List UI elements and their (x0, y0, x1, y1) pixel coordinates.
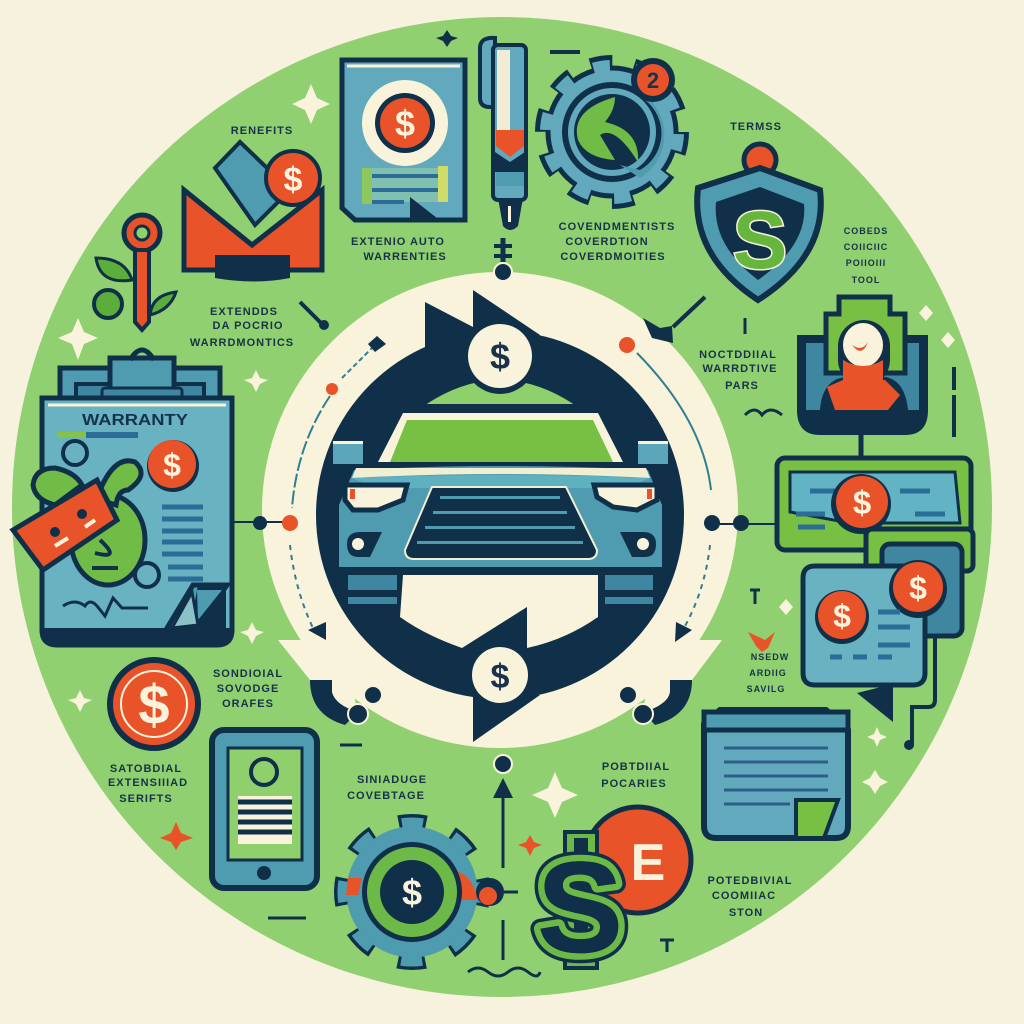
label: potential consumption (708, 875, 792, 919)
icon: folder document (704, 710, 848, 838)
icon: key plant (94, 215, 176, 330)
label: new savings: NSEDW (751, 652, 789, 662)
icon: gear with badge (546, 58, 678, 198)
label: coverage tool: POIIOIII (846, 258, 886, 268)
label: warranty parts: WARRDTIVE (702, 363, 778, 375)
label: service: SOVODGE (217, 683, 279, 695)
label: coverage: COVEBTAGE (347, 790, 425, 802)
label: coverage tool (844, 226, 888, 285)
label: coverage tool: TOOL (852, 275, 880, 285)
car illustration (333, 404, 668, 604)
icon: cards with dollars: $ (909, 570, 927, 606)
label: extended warranties (190, 306, 294, 349)
icon: red dollar coin (110, 660, 198, 748)
label: covenants: COVERDTION (565, 236, 649, 248)
icon: red dollar coin: $ (138, 673, 170, 736)
label: extended auto warranties: EXTENIO AUTO (351, 236, 445, 248)
label: terms: TERMSS (730, 121, 782, 133)
label: extended benefits: SATOBDIAL (110, 763, 182, 775)
label: extended warranties: EXTENDDS (210, 306, 278, 318)
icon: large green dollar and coin: S (537, 834, 623, 980)
label: covenants: COVERDMOITIES (560, 251, 666, 263)
label: warranty parts (699, 349, 778, 392)
label: potential programs: POCARIES (601, 778, 667, 790)
icon: pen (480, 38, 526, 230)
label: new savings (747, 652, 789, 694)
icon: document with dollar (342, 60, 465, 220)
warranty document (13, 350, 232, 645)
label: coverage: SINIADUGE (357, 774, 427, 786)
label: service (213, 668, 283, 710)
top dollar badge (464, 322, 536, 394)
top dollar badge: $ (490, 336, 510, 377)
label: coverage (347, 774, 427, 802)
icon: large green dollar and coin (537, 807, 691, 980)
label: warranty parts: PARS (725, 380, 759, 392)
label: potential programs (601, 761, 670, 790)
icon: shield: S (733, 195, 787, 286)
label: warranty parts: NOCTDDIIAL (699, 349, 777, 361)
label: coverage tool: COBEDS (844, 226, 888, 236)
icon: large green dollar and coin: E (631, 834, 665, 892)
icon: document with dollar: $ (395, 103, 415, 144)
label: new savings: SAVILG (747, 684, 785, 694)
label: extended warranties: DA POCRIO (213, 320, 283, 332)
icon: shield (697, 144, 821, 300)
icon: envelope with dollar (184, 142, 322, 282)
label: potential consumption: COOMIIAC (712, 890, 776, 902)
icon: phone (212, 730, 317, 888)
label: extended benefits (108, 763, 188, 805)
icon: gear with badge: 2 (647, 68, 659, 93)
label: service: ORAFES (222, 698, 274, 710)
icon: person card (797, 297, 928, 458)
label: extended benefits: SERIFTS (119, 793, 173, 805)
center cream circle (262, 272, 738, 748)
warranty document: $ (163, 447, 181, 483)
icon: large green dollar and coin: S (537, 834, 623, 980)
label: extended warranties: WARRDMONTICS (190, 337, 294, 349)
label: covenants (559, 221, 675, 263)
icon: large green dollar and coin: S (537, 834, 623, 980)
label: potential consumption: POTEDBIVIAL (708, 875, 792, 887)
label: extended auto warranties: WARRENTIES (363, 251, 447, 263)
bottom dollar badge: $ (491, 658, 510, 696)
icon: gear dollar (344, 824, 518, 960)
label: service: SONDIOIAL (213, 668, 283, 680)
label: potential consumption: STON (729, 907, 763, 919)
label: extended auto warranties (351, 236, 447, 263)
decorative sparkles (58, 84, 955, 856)
icon: cards with dollars (777, 458, 973, 750)
warranty document: WARRANTY (82, 412, 189, 429)
orbit connectors (232, 30, 954, 976)
label: potential programs: POBTDIIAL (602, 761, 670, 773)
central cycle arrows (316, 290, 684, 742)
bottom dollar badge (472, 647, 528, 703)
label: coverage tool: COIICIIC (844, 242, 888, 252)
icon: cards with dollars: $ (833, 598, 851, 634)
label: new savings: ARDIIG (749, 668, 787, 678)
label: benefits: RENEFITS (231, 125, 293, 137)
icon: cards with dollars: $ (853, 484, 871, 521)
label: covenants: COVENDMENTISTS (559, 221, 675, 233)
icon: envelope with dollar: $ (284, 161, 303, 199)
label: extended benefits: EXTENSIIIAD (108, 777, 188, 789)
icon: gear dollar: $ (402, 872, 422, 913)
